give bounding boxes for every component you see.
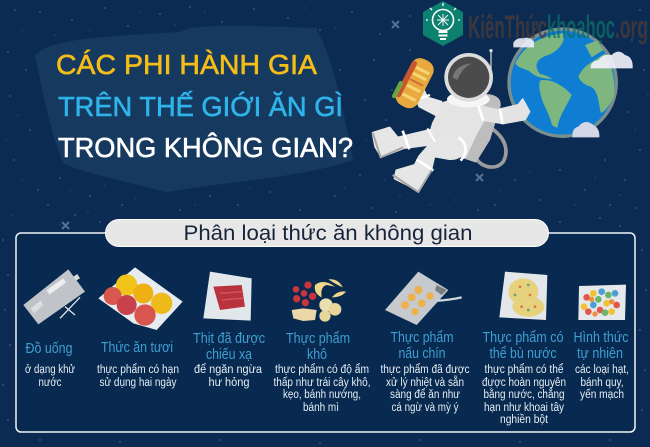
column: cooked food: thực phẩm đã được — [380, 364, 470, 376]
column: fresh food: thực phẩm có hạn — [97, 364, 179, 376]
column: rehydratable food — [482, 272, 566, 426]
column: cooked food — [380, 272, 470, 414]
column: drinks: ở dạng khử — [25, 364, 75, 376]
icon: clouds — [513, 38, 633, 137]
column: fresh food: sử dụng hai ngày — [100, 377, 177, 389]
column: rehydratable food: Thực phẩm có — [482, 330, 564, 346]
icon: earth — [507, 27, 618, 138]
subheading pill: Phân loại thức ăn không gian — [184, 222, 472, 245]
icon: fresh fruit bag — [98, 267, 183, 330]
icon: dried foods — [292, 279, 346, 322]
column: natural food: Hình thức — [574, 330, 628, 346]
icon: drink pouch — [23, 269, 85, 324]
title — [56, 49, 353, 163]
panel: food categories — [16, 220, 635, 432]
column: irradiated meat: Thịt đã được — [193, 331, 265, 347]
title: TRÊN THẾ GIỚI ĂN GÌ — [58, 91, 343, 122]
icon: meat pack — [203, 272, 252, 321]
column: fresh food — [97, 267, 183, 389]
column: natural food — [574, 285, 629, 401]
column: fresh food: Thức ăn tươi — [101, 340, 173, 356]
icon: nuts and snacks pack — [578, 285, 626, 320]
subheading pill — [106, 220, 548, 246]
column: dry food: khô — [307, 347, 327, 363]
column: dry food: thấp như trái cây khô, — [274, 377, 370, 389]
column: drinks: nước — [38, 377, 62, 389]
column: rehydratable food: bằng nước, chẳng — [484, 388, 564, 401]
column: dry food: Thực phẩm — [286, 331, 350, 347]
column: natural food: bánh quy, — [580, 377, 624, 389]
column: dry food: thực phẩm có độ ẩm — [275, 364, 369, 376]
icon: star sparkles — [62, 21, 483, 229]
column: dry food: kẹo, bánh nướng, — [283, 389, 361, 401]
column: natural food: yến mạch — [580, 389, 624, 401]
column: natural food: tự nhiên — [577, 346, 623, 362]
column: cooked food: sàng để ăn như — [390, 389, 460, 401]
column: cooked food: cá ngừ và mỳ ý — [392, 402, 459, 414]
icon: astronaut with sandwich — [373, 49, 529, 192]
column: rehydratable food: thực phẩm có thể — [484, 364, 564, 376]
icon: cooked food pouch — [385, 272, 462, 325]
column: drinks — [23, 269, 85, 389]
title: CÁC PHI HÀNH GIA — [56, 49, 317, 80]
watermark: KiênThức — [468, 9, 547, 45]
column: rehydratable food: được hoàn nguyên — [482, 377, 566, 389]
icon: logo — [423, 1, 463, 46]
column: dry food — [274, 279, 370, 414]
column: cooked food: xử lý nhiệt và sẵn — [386, 376, 464, 389]
column: rehydratable food: thể bù nước — [490, 346, 556, 362]
column: irradiated meat: để ngăn ngừa — [194, 364, 263, 376]
column: dry food: bánh mì — [303, 402, 339, 414]
column: cooked food: Thực phẩm — [390, 330, 454, 346]
column: drinks: Đồ uống — [26, 341, 72, 357]
column: cooked food: nấu chín — [398, 346, 446, 362]
icon: rehydratable food pack — [499, 272, 547, 320]
column: rehydratable food: hạn như khoai tây — [484, 402, 564, 414]
column: rehydratable food: nghiền bột — [500, 414, 549, 426]
panel: title backdrop — [35, 26, 353, 192]
column: irradiated meat: chiếu xạ — [206, 347, 253, 363]
title: TRONG KHÔNG GIAN? — [58, 132, 353, 163]
column: irradiated meat: hư hỏng — [208, 377, 250, 389]
column: natural food: các loại hạt, — [575, 364, 629, 376]
sandwich — [390, 54, 437, 112]
column: irradiated meat — [193, 272, 265, 389]
